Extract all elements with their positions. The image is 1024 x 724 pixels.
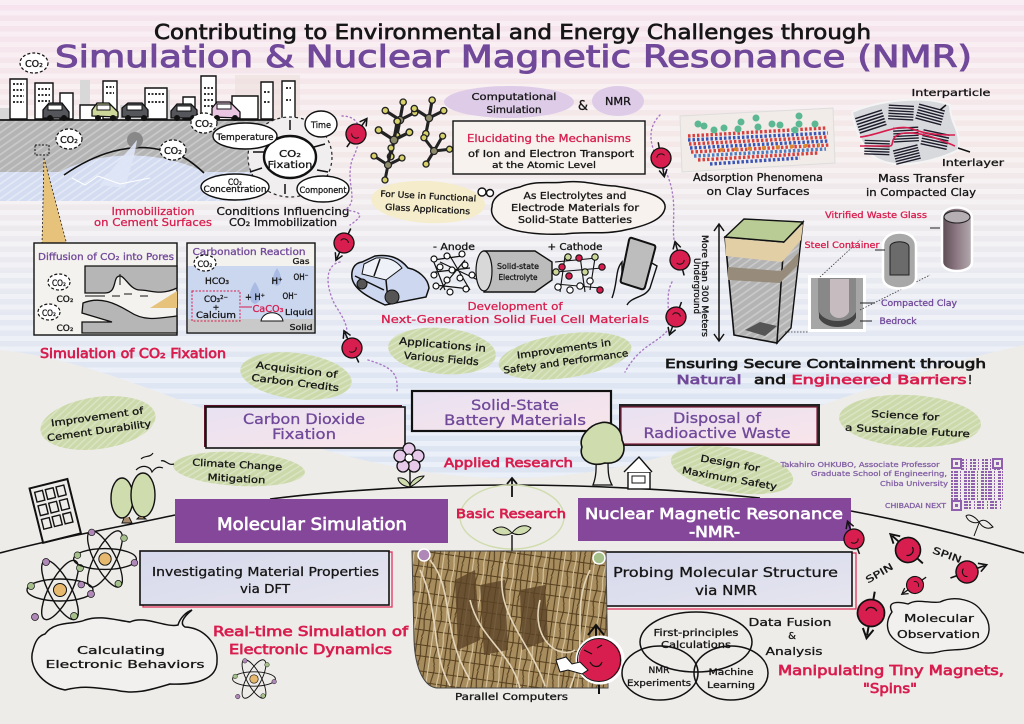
- panel: diffusion of CO2 into pores: CO₂: [42, 309, 56, 319]
- box: Elucidating the Mechanisms: Elucidating the Mechanisms: [467, 133, 631, 145]
- bubble: CO2 road: CO₂: [195, 119, 213, 130]
- oval: Design for Maximum Safety: Design for: [700, 453, 761, 475]
- icon: right sprout: [966, 515, 993, 536]
- illustration: vitrified waste glass canister: [942, 208, 972, 271]
- bar: Nuclear Magnetic Resonance: [578, 498, 851, 541]
- speech cloud: Molecular Observation: Molecular: [904, 612, 975, 625]
- pill: NMR: NMR: [605, 96, 631, 108]
- panel: carbonation reaction: Liquid: [285, 308, 313, 317]
- labels: barrier components: Compacted Clay: [881, 299, 958, 309]
- text: Ensuring Secure Containment: Ensuring Secure Containment through: [665, 357, 986, 371]
- hill line: [0, 485, 1024, 553]
- pill: Computational Simulation: Simulation: [486, 105, 542, 116]
- panel: carbonation reaction: HCO₃: [205, 277, 229, 287]
- ellipse: Machine Learning: Machine: [708, 668, 754, 678]
- illustration: anode network: [431, 251, 478, 295]
- panel: carbonation reaction: OH⁻: [282, 292, 298, 302]
- text: Data Fusion & Analysis: &: [788, 631, 796, 642]
- speech cloud: Molecular Observation: [887, 599, 989, 653]
- oval: For Use in Functional Glass Applications: [370, 178, 486, 226]
- text: Real-time Simulation of Electronic Dynamics: [213, 625, 409, 658]
- title: Simulation & Nuclear Magnetic Resonance (NMR): [55, 40, 972, 75]
- icon: house: [624, 457, 652, 489]
- panel: diffusion of CO2 into pores: Diffusion of CO₂ into Pores: [38, 252, 174, 263]
- cloud: As Electrolytes and Electrode Materials: Solid-State Batteries: [518, 215, 632, 226]
- diagram: data fusion venn: [622, 612, 768, 700]
- box: Probing Molecular Structure via NMR: via NMR: [695, 583, 757, 599]
- ellipse: NMR Experiments: [622, 646, 698, 700]
- ellipse: NMR Experiments: NMR: [648, 666, 670, 676]
- text: Mass Transfer in Compacted Clay: in Compacted Clay: [866, 187, 976, 199]
- panel: carbonation reaction: Calcium: [196, 311, 236, 321]
- bar: Nuclear Magnetic Resonance: -NMR-: [689, 523, 740, 541]
- text: Applied Research: Applied Research: [444, 455, 573, 470]
- oval: For Use in Functional Glass Applications: For Use in Functional: [380, 190, 476, 205]
- bubble: CO2 top-left: CO₂: [25, 59, 43, 70]
- box: Disposal of Radioactive Waste: Radioactive Waste: [644, 426, 790, 442]
- labels: barrier components: [804, 211, 958, 327]
- speech cloud: Calculating Electronic Behaviors: [32, 610, 217, 692]
- text: author credit: CHIBADAI NEXT: [885, 502, 947, 510]
- oval: Improvements in Safety and Performance: [496, 325, 634, 387]
- panel: carbonation reaction: [187, 243, 315, 333]
- pill: Computational Simulation: Computational: [472, 92, 556, 103]
- illustration: solid-state electrolyte: Solid-state: [497, 262, 539, 271]
- oval: Improvement of Cement Durability: Cement Durability: [46, 419, 152, 444]
- oval: Improvement of Cement Durability: [37, 389, 159, 457]
- text: Mass Transfer in Compacted Clay: [866, 173, 976, 199]
- oval: Improvements in Safety and Performance: Safety and Performance: [503, 348, 629, 377]
- text: Mass Transfer in Compacted Clay: Mass Transfer: [878, 173, 965, 185]
- box: Probing Molecular Structure via NMR: Probing Molecular Structure: [613, 565, 838, 581]
- box: Carbon Dioxide Fixation: Fixation: [272, 427, 336, 443]
- bubble: CO2 top-left: [20, 53, 48, 73]
- diagram: conditions influencing CO2 fixation: [201, 111, 349, 202]
- panel: carbonation reaction: +: [213, 303, 219, 312]
- oval: Applications in Various Fields: [386, 323, 498, 379]
- illustration: phone in hand: [612, 238, 657, 305]
- illustration: solid-state electrolyte: Electrolyte: [498, 273, 538, 282]
- box: Solid-State Battery Materials: Solid-State: [471, 398, 559, 414]
- panel: carbonation reaction: Solid: [290, 323, 312, 332]
- bubble: CO2 mound: [160, 140, 186, 160]
- bar: Nuclear Magnetic Resonance: Nuclear Magnetic Resonance: [585, 505, 843, 523]
- oval: Science for a Sustainable Future: [838, 391, 982, 451]
- label: SPIN right: SPIN: [931, 545, 963, 566]
- text: Adsorption Phenomena on Clay Surfaces: on Clay Surfaces: [706, 186, 810, 198]
- text: Conditions Influencing CO2 Immobilization: [216, 205, 350, 229]
- illustration: steel container: [883, 232, 916, 288]
- text: Ensuring Secure Containment: Natural: [676, 373, 742, 387]
- ellipse: First-principles Calculations: First-principles: [654, 628, 739, 639]
- box: Elucidating the Mechanisms: at the Atomic Level: [492, 161, 596, 171]
- illustration: city skyline and road: [0, 75, 300, 120]
- text: Real-time Simulation of Electronic Dynamics: Electronic Dynamics: [229, 643, 392, 658]
- oval: Applications in Various Fields: Various Fields: [403, 351, 479, 368]
- bubble: CO2 mound: CO₂: [164, 146, 182, 157]
- text: Parallel Computers: Parallel Computers: [455, 692, 568, 703]
- illustration: cars: [43, 102, 240, 121]
- illustration: molecules: [371, 97, 457, 183]
- text: Simulation of CO2 Fixation: Simulation of CO₂ Fixation: [40, 347, 226, 362]
- panel: carbonation reaction: Gas: [292, 257, 310, 266]
- text: Ensuring Secure Containment: Engineered Barriers: [792, 373, 966, 387]
- box: Disposal of Radioactive Waste: [619, 404, 820, 446]
- text: Manipulating Tiny Magnets, Spins: Manipulating Tiny Magnets,: [778, 664, 1004, 679]
- bubble: Component: [297, 176, 349, 202]
- text: author credit: Graduate School of Engineering,: [811, 470, 947, 478]
- panel: carbonation reaction: CO₃²⁻: [204, 295, 228, 305]
- panel: diffusion of CO2 into pores: CO₂: [56, 324, 74, 334]
- label: + Cathode: + Cathode: [548, 242, 603, 253]
- text: Real-time Simulation of Electronic Dynamics: Real-time Simulation of: [213, 625, 409, 640]
- ellipse: Machine Learning: Learning: [707, 681, 755, 691]
- arrow: basic to applied: [507, 478, 517, 497]
- pill: NMR: [592, 86, 644, 116]
- text: author credit: [779, 461, 948, 510]
- diagram: geological repository block: [691, 219, 803, 343]
- icon: tree: [581, 422, 624, 485]
- illustration: solid-state electrolyte: [476, 251, 552, 292]
- icon: building: [30, 479, 81, 543]
- panel: carbonation reaction: CaCO₃: [252, 304, 284, 315]
- speech cloud: Calculating Electronic Behaviors: Electronic Behaviors: [46, 659, 204, 671]
- text: Development of Next-Generation Solid Fuel Cell Materials: Next-Generation Solid Fuel Cell Materials: [381, 313, 649, 326]
- text: Ensuring Secure Containment: and: [754, 373, 786, 387]
- cloud: As Electrolytes and Electrode Materials: Electrode Materials for: [511, 203, 639, 214]
- oval: Design for Maximum Safety: Maximum Safety: [681, 465, 778, 493]
- labels: barrier components: Steel Container: [804, 241, 880, 251]
- text: Data Fusion & Analysis: [748, 616, 832, 658]
- box: Probing Molecular Structure via NMR: [605, 552, 856, 609]
- panel: diffusion of CO2 into pores: CO₂: [52, 279, 66, 289]
- panel: carbonation reaction: H⁺: [272, 277, 283, 287]
- text: Adsorption Phenomena on Clay Surfaces: [693, 172, 823, 198]
- diagram: mass transfer in compacted clay: Interlayer: [942, 158, 1004, 169]
- bubble: CO2 Concentration: [201, 174, 269, 200]
- text: Manipulating Tiny Magnets, Spins: [778, 664, 1004, 697]
- oval: Acquisition of Carbon Credits: Acquisition of: [255, 360, 339, 381]
- bubble: CO2 surface: [56, 129, 82, 149]
- icon: birds: [136, 453, 174, 472]
- bubble: CO2 Concentration: CO₂: [228, 178, 242, 188]
- text: Adsorption Phenomena on Clay Surfaces: Adsorption Phenomena: [693, 172, 823, 184]
- panel: carbonation reaction: + H⁺: [245, 293, 265, 303]
- bar: Molecular Simulation: Molecular Simulation: [217, 515, 407, 535]
- text: Immobilization on Cement Surfaces: Immobilization: [112, 205, 195, 218]
- panel: carbonation reaction: OH⁻: [294, 273, 309, 283]
- illustration: cement surface and water: [0, 121, 278, 201]
- callout wedge: zoom to pores: [42, 158, 67, 245]
- text: Data Fusion & Analysis: Analysis: [766, 645, 823, 658]
- panel: diffusion of CO2 into pores: CO₂: [56, 295, 74, 305]
- box: Elucidating the Mechanisms: of Ion and Electron Transport: [468, 149, 634, 160]
- box: Carbon Dioxide Fixation: Carbon Dioxide: [243, 412, 365, 428]
- bar: Molecular Simulation: [175, 499, 448, 543]
- bubble: Temperature: Temperature: [216, 133, 274, 143]
- spins: NMR spin field: [838, 518, 990, 641]
- text: author credit: Takahiro OHKUBO, Associate Professor: [779, 461, 940, 469]
- label: - Anode: - Anode: [433, 242, 475, 253]
- speech cloud: Molecular Observation: Observation: [897, 628, 980, 641]
- icon: flower: [394, 443, 424, 487]
- title: Contributing to Environmental and Energy Challenges through: [154, 20, 871, 44]
- oval: Climate Change Mitigation: [172, 449, 306, 489]
- bubble: CO2 surface: CO₂: [60, 135, 78, 146]
- bubble: Time: [305, 111, 337, 137]
- box: Solid-State Battery Materials: Battery Materials: [444, 413, 586, 429]
- text: Immobilization on Cement Surfaces: [94, 205, 212, 229]
- speech cloud: Calculating Electronic Behaviors: Calculating: [77, 645, 165, 657]
- box: Carbon Dioxide Fixation: [204, 405, 405, 448]
- diagram: mass transfer in compacted clay: [852, 88, 1004, 169]
- oval: For Use in Functional Glass Applications: Glass Applications: [385, 203, 471, 217]
- box: Solid-State Battery Materials: [412, 391, 611, 431]
- image: clay surface adsorption: [680, 108, 835, 172]
- oval: Climate Change Mitigation: Climate Change: [192, 458, 283, 473]
- box: Investigating Material Properties via DFT: Investigating Material Properties: [152, 564, 379, 579]
- character: big red spin: [556, 625, 623, 694]
- diagram: geological repository block: Underground: [691, 258, 701, 314]
- image: parallel computers: [412, 549, 608, 688]
- dotted spin paths: [328, 115, 675, 392]
- text: Development of Next-Generation Solid Fuel Cell Materials: [381, 300, 649, 326]
- illustration: car: [352, 256, 429, 305]
- oval: Science for a Sustainable Future: a Sustainable Future: [845, 423, 970, 440]
- ring: basic research: [460, 485, 564, 549]
- text: Development of Next-Generation Solid Fuel Cell Materials: Development of: [468, 300, 564, 313]
- central ellipse: CO2 Fixation: CO₂: [279, 149, 301, 160]
- box: Investigating Material Properties via DFT: via DFT: [240, 581, 290, 596]
- oval: Design for Maximum Safety: [667, 438, 797, 502]
- oval: Improvements in Safety and Performance: Improvements in: [516, 338, 612, 362]
- spin markers: [327, 113, 694, 367]
- oval: Improvement of Cement Durability: Improvement of: [50, 406, 145, 429]
- ellipse: NMR Experiments: Experiments: [627, 679, 691, 689]
- text: Manipulating Tiny Magnets, Spins: "Spins": [863, 682, 917, 697]
- oval: Applications in Various Fields: Applications in: [399, 336, 486, 355]
- text: ampersand: &: [578, 99, 588, 114]
- text: Conditions Influencing CO2 Immobilization: CO₂ Immobilization: [229, 216, 337, 229]
- text: author credit: Chiba University: [880, 480, 948, 488]
- cloud: As Electrolytes and Electrode Materials: As Electrolytes and: [524, 191, 626, 202]
- pill: Computational Simulation: [444, 86, 574, 118]
- title: [55, 20, 972, 75]
- text: Basic Research: Basic Research: [456, 507, 566, 521]
- oval: Science for a Sustainable Future: Science for: [871, 409, 940, 424]
- panel: diffusion of CO2 into pores: [34, 243, 177, 335]
- icon: trees: [111, 473, 155, 523]
- bubble: CO2 Concentration: Concentration: [204, 185, 266, 195]
- diagram: mass transfer in compacted clay: Interparticle: [912, 88, 991, 99]
- oval: Climate Change Mitigation: Mitigation: [207, 472, 266, 486]
- box: Disposal of Radioactive Waste: Disposal of: [673, 411, 762, 427]
- illustration: cross-section: [785, 240, 930, 332]
- labels: barrier components: Bedrock: [880, 317, 917, 327]
- icon: sprout: [493, 526, 531, 552]
- atoms: electronic structure: [27, 526, 276, 701]
- oval: Acquisition of Carbon Credits: Carbon Credits: [251, 373, 339, 394]
- labels: barrier components: Vitrified Waste Glass: [825, 211, 927, 221]
- box: Investigating Material Properties via DFT: [140, 551, 392, 607]
- central ellipse: CO2 Fixation: [264, 136, 316, 178]
- text: Ensuring Secure Containment: [665, 357, 986, 387]
- central ellipse: CO2 Fixation: Fixation: [268, 160, 312, 171]
- diagram: geological repository block: More than 300 Meters: [699, 235, 709, 338]
- label: SPIN left: SPIN: [864, 562, 895, 586]
- bubble: Time: Time: [310, 121, 331, 131]
- ellipse: Machine Learning: [694, 646, 768, 700]
- text: Immobilization on Cement Surfaces: on Cement Surfaces: [94, 216, 212, 229]
- panel: carbonation reaction: CO₂: [198, 260, 212, 270]
- box: Elucidating the Mechanisms: [453, 121, 645, 174]
- ellipse: First-principles Calculations: [640, 612, 752, 672]
- QR code: [951, 459, 1003, 510]
- ellipse: First-principles Calculations: Calculations: [661, 640, 731, 651]
- panel: carbonation reaction: Carbonation Reaction: [192, 247, 306, 258]
- bubble: CO2 road: [191, 113, 217, 133]
- text: Conditions Influencing CO2 Immobilization: Conditions Influencing: [216, 205, 350, 218]
- oval: Acquisition of Carbon Credits: [238, 346, 354, 406]
- text: Data Fusion & Analysis: Data Fusion: [748, 616, 832, 629]
- bubble: Component: Component: [300, 186, 347, 196]
- bubble: Temperature: [213, 123, 277, 149]
- text: Ensuring Secure Containment: !: [968, 373, 972, 387]
- cloud: As Electrolytes and Electrode Materials: [478, 182, 665, 234]
- illustration: cathode network: [553, 254, 605, 293]
